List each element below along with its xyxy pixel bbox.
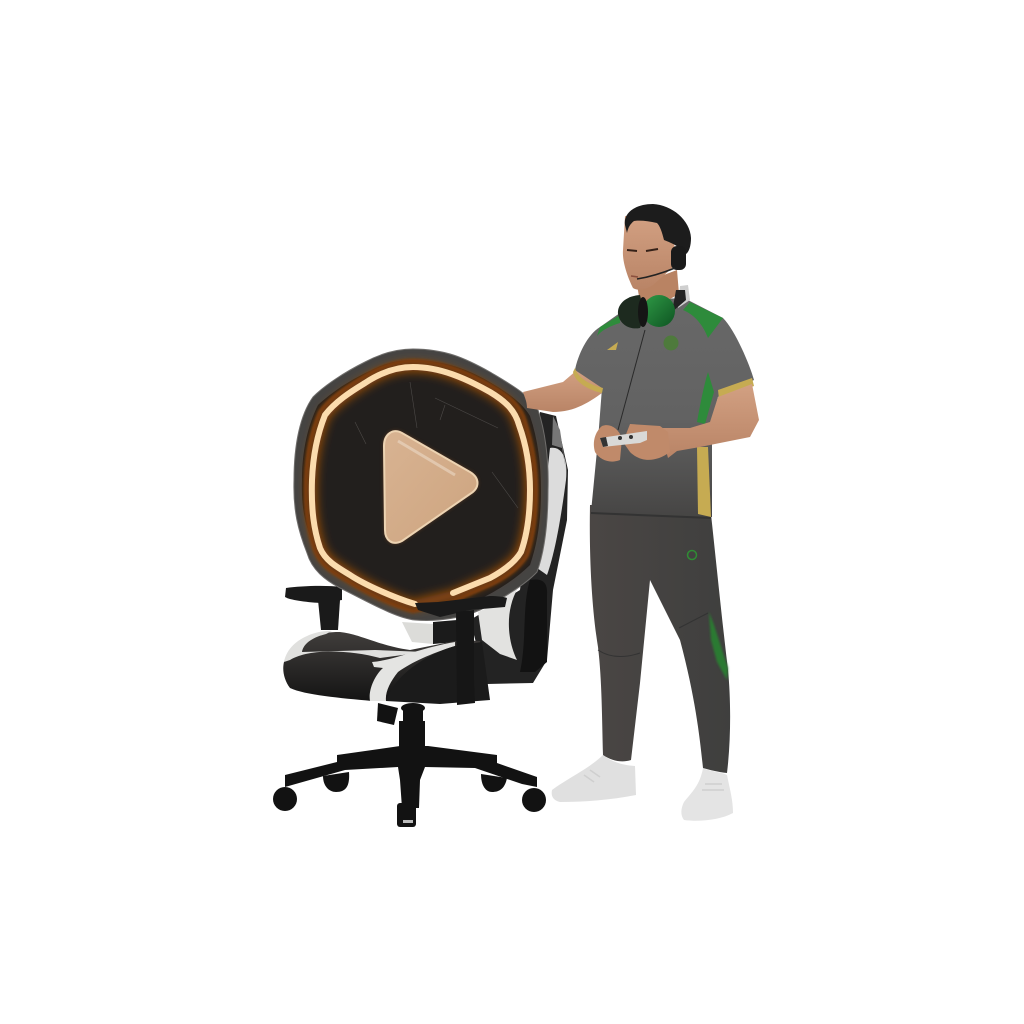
medallion: dark inner face (302, 360, 541, 611)
figure: neck (637, 270, 679, 310)
illustration: gamer standing beside gaming chair (273, 204, 759, 827)
figure: white sneakers (552, 755, 733, 821)
medallion: scratches (355, 382, 518, 508)
figure: neck headphones (618, 285, 690, 328)
shirt: green shoulder panels (683, 302, 723, 338)
figure: right forearm across the shirt (660, 384, 759, 458)
figure: polo shirt (573, 298, 754, 519)
icon: play triangle (384, 431, 478, 543)
medallion: glowing neon ring (312, 367, 530, 604)
figure: left arm resting on medallion (523, 370, 606, 412)
gaming chair (273, 412, 568, 827)
figure: headset with mic boom (637, 246, 686, 279)
chair: left armrest (285, 586, 342, 630)
medallion: distressed rim (294, 349, 548, 620)
gamer figure (523, 204, 759, 821)
figure: jogger pants (590, 505, 730, 773)
figure: head and face (623, 204, 691, 290)
shirt: chest badges (664, 336, 678, 350)
chair: backrest behind the medallion (402, 412, 568, 684)
medallion: hexagonal play badge (294, 349, 548, 620)
chair: right armrest in front of medallion (415, 596, 507, 705)
shirt: gold trim (697, 447, 711, 517)
chair: gas lift and five-star base (273, 703, 546, 827)
chair: seat cushion (283, 631, 490, 704)
medallion: orange ambient glow (306, 361, 536, 611)
figure: hands holding game controller (594, 424, 670, 462)
